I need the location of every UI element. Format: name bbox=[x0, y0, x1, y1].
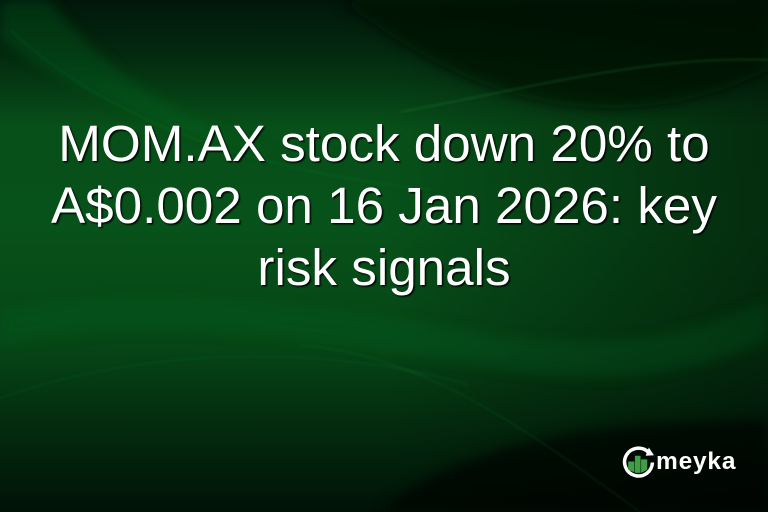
logo: meyka bbox=[622, 446, 736, 478]
title: A$0.002 on 16 Jan 2026: key bbox=[51, 177, 717, 234]
icon: circular arrow with green bars bbox=[622, 446, 654, 478]
title: MOM.AX stock down 20% to bbox=[58, 115, 710, 172]
title: risk signals bbox=[257, 239, 511, 296]
title bbox=[51, 115, 718, 298]
brand name: meyka bbox=[656, 448, 736, 475]
